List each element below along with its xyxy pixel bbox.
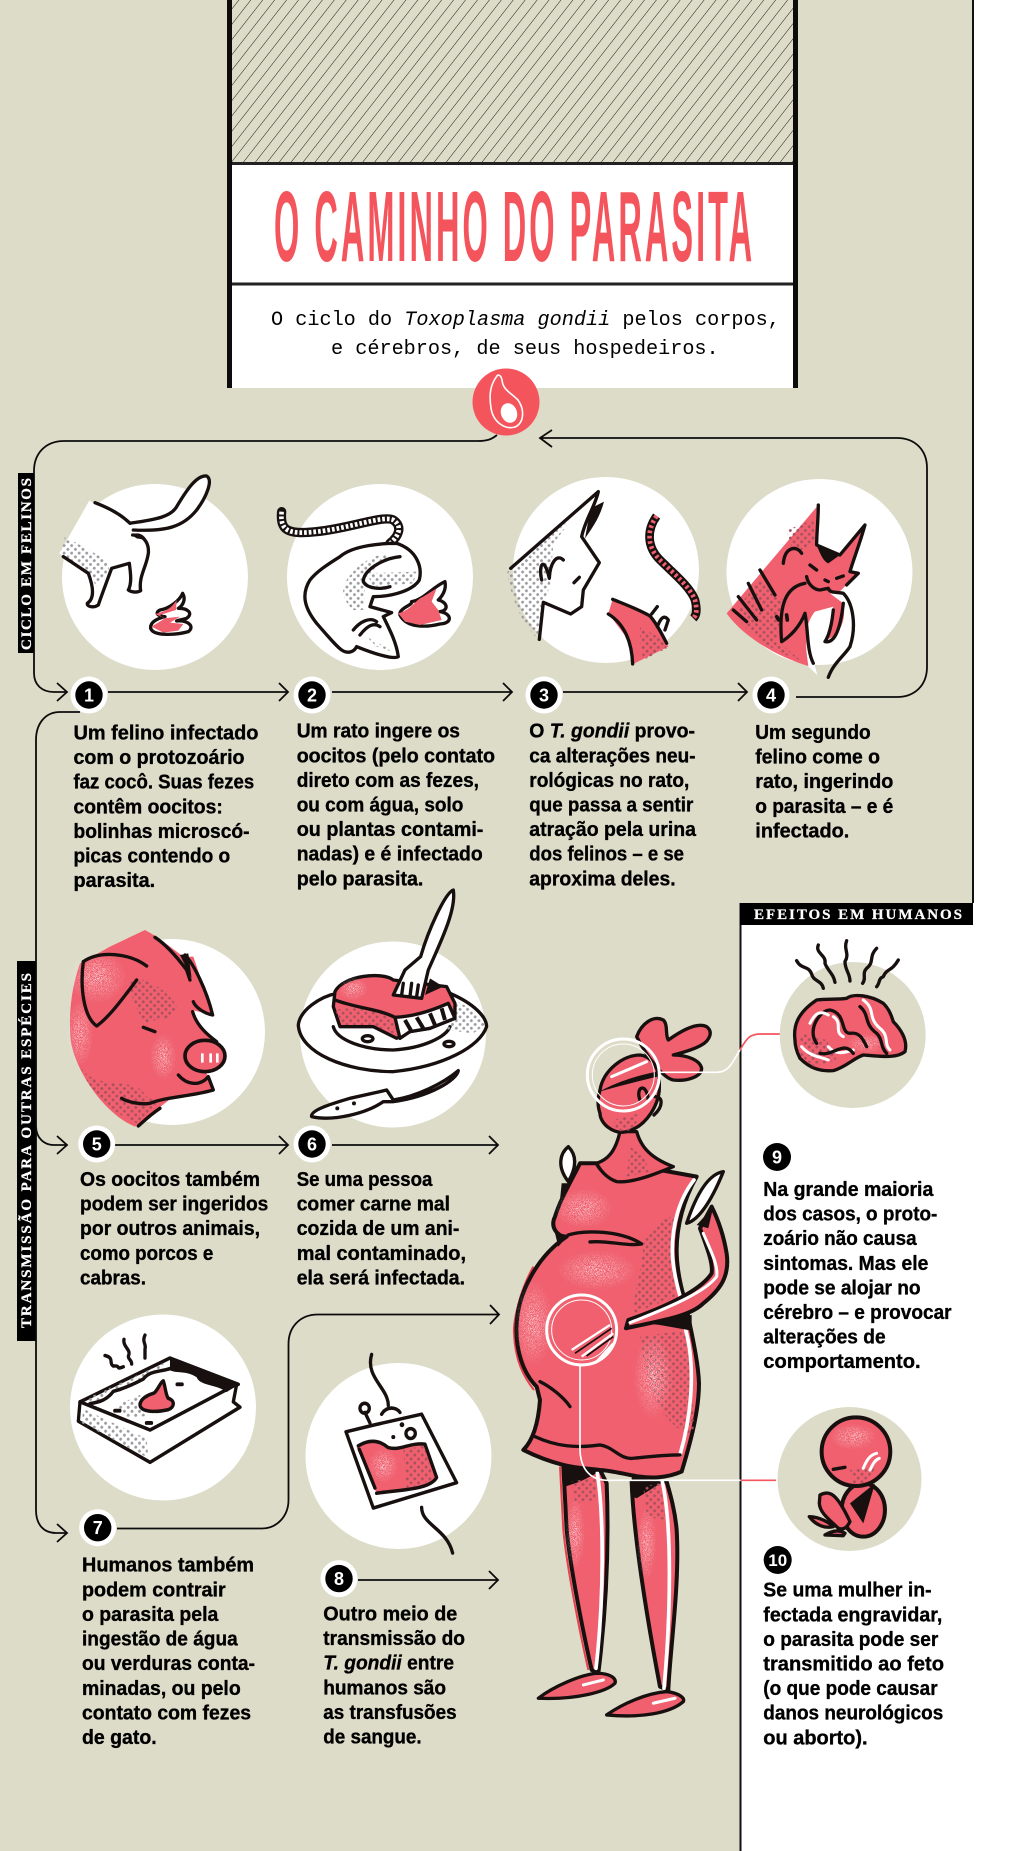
step 2 — [281, 484, 495, 890]
text 6: ela será infectada. — [297, 1267, 465, 1289]
text 1: com o protozoário — [74, 747, 244, 769]
text 1: Um felino infectado — [74, 722, 258, 744]
step 10 — [763, 1407, 944, 1749]
text 7: o parasita pela — [82, 1604, 219, 1626]
text 3: que passa a sentir — [529, 794, 693, 816]
text 1: parasita. — [74, 870, 155, 892]
arrow: branch to other species — [36, 712, 80, 1542]
icon: cat and feces — [59, 476, 209, 634]
label: ciclo em felinos: CICLO EM FELINOS — [19, 478, 35, 650]
badge 2: 2 — [307, 686, 317, 706]
text 1: bolinhas microscó- — [74, 821, 250, 843]
step 4 — [726, 479, 912, 842]
text 2: ou com água, solo — [297, 794, 463, 816]
arrow: from step 4 back to parasite — [540, 430, 927, 697]
text 10: Se uma mulher in- — [763, 1580, 932, 1602]
text 9: cérebro – e provocar — [763, 1302, 952, 1324]
text 8: transmissão do — [323, 1628, 465, 1650]
icon: brain — [795, 941, 906, 1071]
text 1: contêm oocitos: — [74, 796, 223, 818]
text 7: ingestão de água — [82, 1629, 239, 1651]
text 3: rológicas no rato, — [529, 770, 689, 792]
legs — [560, 1465, 677, 1690]
lens on head — [587, 1039, 659, 1111]
connector to fetus — [580, 1365, 741, 1480]
text 4: rato, ingerindo — [755, 771, 893, 793]
text 6: mal contaminado, — [297, 1243, 466, 1265]
step 8 — [306, 1354, 492, 1749]
subtitle: e cérebros, de seus hospedeiros. — [331, 338, 719, 361]
text 4: o parasita – e é — [755, 796, 893, 818]
step 6 — [294, 890, 487, 1289]
dress shading — [513, 1180, 695, 1458]
text 8 — [323, 1603, 465, 1749]
title: O CAMINHO DO PARASITA — [274, 171, 752, 283]
text 8: Outro meio de — [323, 1603, 457, 1625]
label: transmissao para outras especies: TRANSMISSÃO PARA OUTRAS ESPÉCIES — [17, 973, 35, 1328]
text 6: comer carne mal — [297, 1194, 450, 1216]
text 9: sintomas. Mas ele — [763, 1253, 928, 1275]
text 1: picas contendo o — [74, 846, 230, 868]
text 2 — [297, 721, 495, 890]
badge 10 — [764, 1546, 792, 1574]
badge 6: 6 — [307, 1134, 317, 1154]
arrow: step 8 to woman — [358, 1571, 498, 1589]
lens on belly — [547, 1295, 617, 1365]
text 4 — [755, 722, 893, 842]
text 10: fectada engravidar, — [763, 1604, 942, 1626]
dress — [514, 1267, 534, 1390]
arrow: step 6 to woman — [332, 1136, 498, 1154]
text 10 — [763, 1580, 944, 1749]
icon: pig head — [67, 930, 227, 1127]
text 4: felino come o — [755, 747, 880, 769]
text 9: alterações de — [763, 1327, 886, 1349]
step 3 — [507, 477, 699, 890]
step 9 — [763, 941, 952, 1373]
text 3: aproxima deles. — [529, 868, 676, 890]
badge 4: 4 — [766, 686, 776, 706]
text 9: pode se alojar no — [763, 1277, 921, 1299]
text 3: O T. gondii provo- — [529, 721, 695, 743]
text 9: dos casos, o proto- — [763, 1204, 937, 1226]
text 9: zoário não causa — [763, 1228, 917, 1250]
text 10: (o que pode causar — [763, 1678, 938, 1700]
badge 1 — [70, 676, 108, 714]
text 5: por outros animais, — [80, 1218, 260, 1240]
icon: cat eating rat — [727, 505, 865, 677]
text 5: Os oocitos também — [80, 1169, 260, 1191]
text 3: dos felinos – e se — [529, 844, 684, 866]
text 4: Um segundo — [755, 722, 871, 744]
text 2: ou plantas contami- — [297, 819, 483, 841]
text 1 — [74, 722, 258, 892]
icon: steak, fork and knife — [298, 890, 487, 1118]
arrow: step 3 to step 4 — [563, 683, 747, 701]
text 2: oocitos (pelo contato — [297, 745, 495, 767]
step 7 — [70, 1314, 256, 1749]
step 5 — [67, 930, 268, 1289]
badge 7: 7 — [93, 1518, 103, 1538]
step 1 — [59, 476, 259, 892]
sleeves — [561, 1147, 723, 1228]
badge 2 — [294, 676, 330, 714]
neck — [597, 1132, 673, 1182]
arrow: step 2 to step 3 — [332, 683, 512, 701]
text 8: de sangue. — [323, 1727, 422, 1749]
text 3: atração pela urina — [529, 819, 697, 841]
text 2: nadas) e é infectado — [297, 844, 483, 866]
icon: blood bag — [346, 1354, 457, 1553]
text 7: ou verduras conta- — [82, 1653, 255, 1675]
icon: fetus — [809, 1417, 890, 1537]
subtitle: O ciclo do Toxoplasma gondii pelos corpos, — [271, 309, 780, 332]
text 9 — [763, 1179, 952, 1373]
badge 9 — [763, 1143, 791, 1171]
text 5 — [80, 1169, 268, 1289]
badge 5 — [78, 1126, 115, 1162]
badge 3: 3 — [539, 686, 549, 706]
text 7: de gato. — [82, 1727, 157, 1749]
text 10: ou aborto). — [763, 1727, 868, 1749]
badge 4 — [752, 676, 790, 714]
text 6 — [297, 1169, 466, 1289]
text 6: Se uma pessoa — [297, 1169, 433, 1191]
shoes — [538, 1673, 684, 1716]
icon: cat and attracted rat — [507, 492, 696, 664]
arrow: step 1 to step 2 — [108, 683, 288, 701]
text 10: o parasita pode ser — [763, 1629, 938, 1651]
text 7: podem contrair — [82, 1579, 226, 1601]
right white column — [741, 0, 1024, 1851]
arrow: step 5 to step 6 — [115, 1136, 288, 1154]
text 1: faz cocô. Suas fezes — [74, 772, 254, 794]
header panel — [227, 0, 798, 388]
arrow: step 7 to woman — [117, 1305, 499, 1528]
badge 8 — [320, 1560, 358, 1597]
text 8: humanos são — [323, 1677, 446, 1699]
text 5: cabras. — [80, 1267, 146, 1289]
text 10: transmitido ao feto — [763, 1654, 944, 1676]
arm — [626, 1207, 727, 1328]
arrow: cycle from parasite to step 1 — [34, 435, 497, 701]
text 6: cozida de um ani- — [297, 1218, 459, 1240]
text 2: direto com as fezes, — [297, 770, 479, 792]
text 5: podem ser ingeridos — [80, 1194, 268, 1216]
text 9: comportamento. — [763, 1351, 921, 1373]
label: efeitos em humanos — [740, 903, 973, 925]
label: efeitos em humanos: EFEITOS EM HUMANOS — [754, 907, 962, 923]
badge 9: 9 — [772, 1148, 782, 1168]
badge 6 — [294, 1126, 330, 1162]
text 7: contato com fezes — [82, 1702, 251, 1724]
badge 5: 5 — [92, 1134, 102, 1154]
badge 3 — [526, 676, 562, 714]
text 2: Um rato ingere os — [297, 721, 460, 743]
badge 8: 8 — [334, 1569, 344, 1589]
text 3: ca alterações neu- — [529, 745, 696, 767]
text 4: infectado. — [755, 820, 849, 842]
illustration: pregnant woman — [513, 1019, 780, 1716]
text 8: T. gondii entre — [323, 1653, 454, 1675]
head — [598, 1055, 659, 1132]
icon: litter box — [78, 1335, 240, 1462]
text 5: como porcos e — [80, 1243, 213, 1265]
icon: parasite oocyst — [472, 368, 540, 436]
text 9: Na grande maioria — [763, 1179, 934, 1201]
text 7 — [82, 1555, 255, 1749]
badge 10: 10 — [768, 1551, 787, 1570]
text 7: minadas, ou pelo — [82, 1678, 241, 1700]
badge 1: 1 — [84, 686, 94, 706]
text 2: pelo parasita. — [297, 868, 423, 890]
hair bun — [637, 1019, 710, 1080]
badge 7 — [79, 1509, 116, 1546]
text 8: as transfusões — [323, 1702, 457, 1724]
connector to brain — [660, 1050, 740, 1072]
text 7: Humanos também — [82, 1555, 254, 1577]
text 3 — [529, 721, 697, 890]
icon: rat eating feces — [281, 512, 449, 658]
text 10: danos neurológicos — [763, 1703, 943, 1725]
